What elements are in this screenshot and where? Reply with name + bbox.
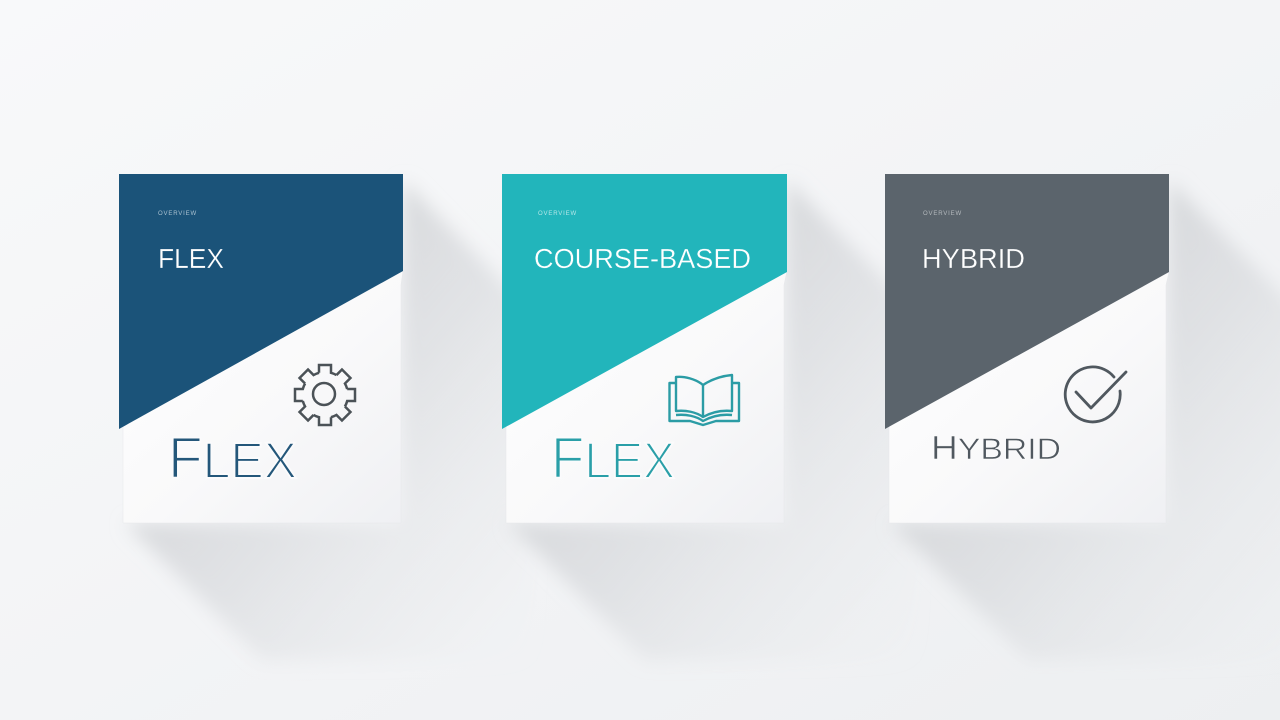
panel: hybrid card (885, 174, 1280, 660)
small caption: hybrid: OVERVIEW (923, 211, 962, 217)
long shadow: flex card (125, 180, 530, 660)
label: course-based flex: FLEX (551, 426, 675, 491)
icon: open book (670, 375, 739, 425)
icon: check circle (1065, 367, 1126, 422)
heading: flex: FLEX (158, 243, 224, 274)
panel: flex card (119, 174, 530, 660)
colour header: flex (119, 174, 403, 429)
heading: hybrid: HYBRID (922, 243, 1025, 274)
colour header: course-based (502, 174, 787, 429)
card body: course-based (506, 271, 787, 523)
colour header: hybrid (885, 174, 1169, 429)
label: flex: FLEX (168, 426, 297, 491)
long shadow: hybrid card (891, 180, 1280, 660)
panel: course-based card (502, 174, 914, 660)
heading: course-based: COURSE-BASED (534, 243, 751, 274)
card body: hybrid (889, 272, 1169, 523)
icon: gear (295, 365, 355, 425)
label: hybrid: HYBRID (931, 429, 1061, 466)
small caption: flex: OVERVIEW (158, 211, 197, 217)
card body: flex (123, 271, 403, 523)
long shadow: course-based card (508, 180, 914, 660)
small caption: course-based: OVERVIEW (538, 211, 577, 217)
